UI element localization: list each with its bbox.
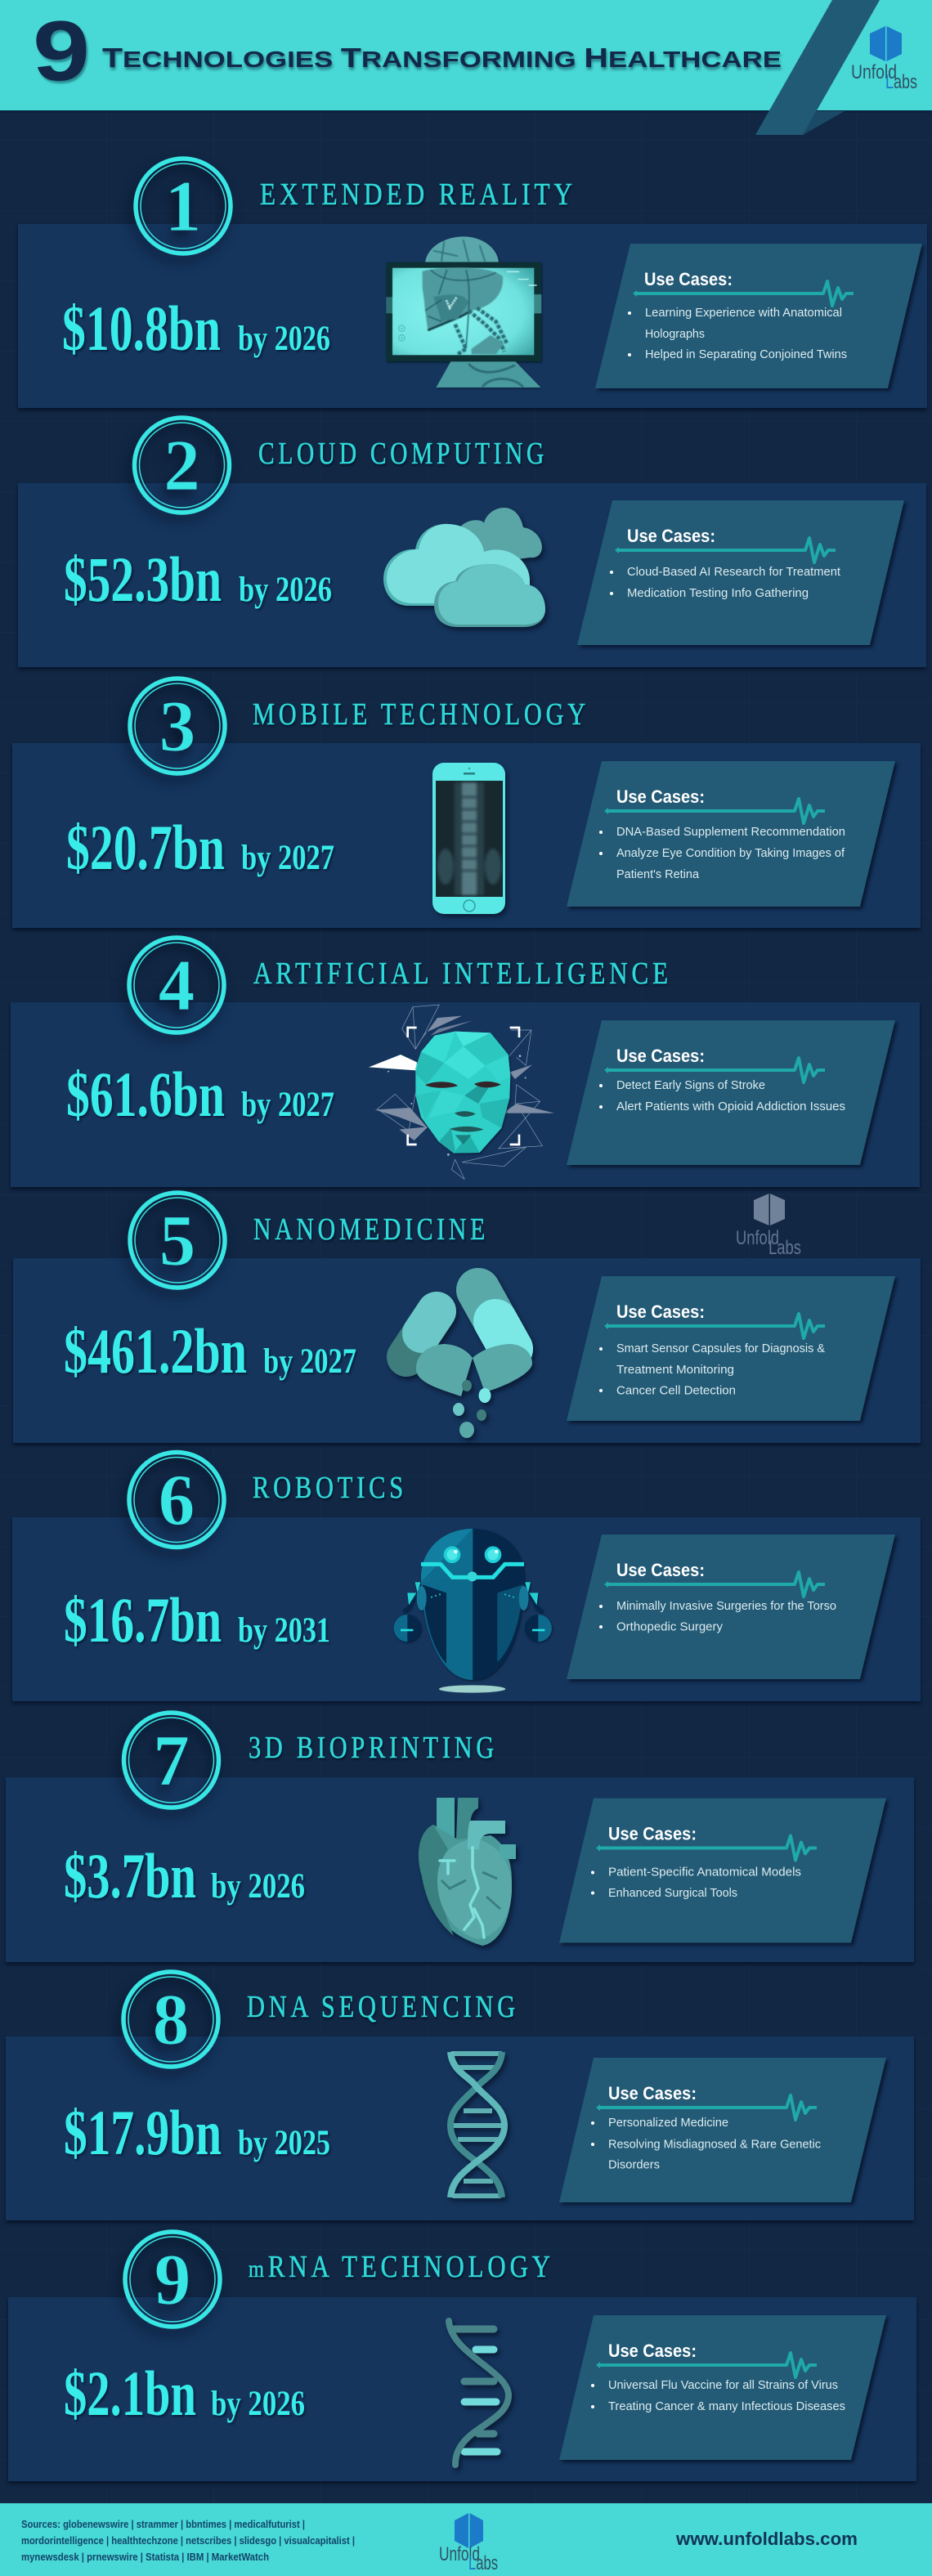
section 5: Nanomedicine xyxy=(13,1193,921,1443)
use cases panel: Use Cases: xyxy=(616,1046,705,1066)
title: TECHNOLOGIES TRANSFORMING HEALTHCARE xyxy=(102,43,782,73)
use cases panel: Cloud-Based AI Research for Treatment xyxy=(627,566,840,579)
heading: NANOMEDICINE xyxy=(253,1212,489,1247)
panel background xyxy=(12,1517,921,1701)
use cases panel xyxy=(559,2058,886,2202)
use cases panel: Personalized Medicine xyxy=(608,2117,728,2130)
use cases panel: Use Cases: xyxy=(616,786,705,807)
sources: mordorintelligence | healthtechzone | netscribes | slidesgo | visualcapitalist | xyxy=(21,2535,355,2547)
icon: robot xyxy=(394,1529,552,1693)
market size: by 2025 xyxy=(238,2124,330,2162)
use cases panel: Use Cases: xyxy=(616,1301,705,1322)
header logo xyxy=(851,26,917,93)
use cases panel xyxy=(567,761,895,907)
market size: $61.6bn xyxy=(66,1059,225,1130)
heading: EXTENDED REALITY xyxy=(260,177,576,212)
sources: Sources: globenewswire | strammer | bbntimes | medicalfuturist | xyxy=(21,2519,305,2530)
icon: mRNA strand xyxy=(449,2321,509,2465)
number badge 2 xyxy=(134,418,229,513)
use cases panel: Medication Testing Info Gathering xyxy=(627,587,809,600)
section 4: Artificial Intelligence xyxy=(11,938,920,1187)
panel background xyxy=(11,1002,920,1187)
market size: $52.3bn xyxy=(64,544,222,615)
heading: MOBILE TECHNOLOGY xyxy=(253,697,589,732)
sources xyxy=(21,2519,355,2563)
number badge 2: 2 xyxy=(164,426,200,506)
heading: CLOUD COMPUTING xyxy=(258,437,548,471)
heading: DNA SEQUENCING xyxy=(247,1990,519,2024)
number badge 4: 4 xyxy=(159,946,195,1026)
footer logo: Labs xyxy=(468,2552,498,2574)
number badge 9: 9 xyxy=(155,2240,190,2320)
heading: ROBOTICS xyxy=(253,1471,407,1505)
use cases panel: Orthopedic Surgery xyxy=(616,1620,724,1633)
market size: by 2026 xyxy=(211,2385,305,2423)
use cases panel xyxy=(567,1276,895,1421)
section 2: Cloud Computing xyxy=(18,418,926,667)
number badge 8: 8 xyxy=(153,1980,189,2060)
icon: clouds xyxy=(383,508,545,627)
header logo: Labs xyxy=(885,71,917,93)
number badge 7 xyxy=(124,1713,219,1808)
panel background xyxy=(12,743,921,928)
section 8: DNA Sequencing xyxy=(6,1972,914,2220)
number badge 6 xyxy=(129,1452,224,1547)
use cases panel: Cancer Cell Detection xyxy=(616,1385,736,1398)
number badge 7: 7 xyxy=(153,1721,190,1801)
watermark logo: Labs xyxy=(768,1237,801,1259)
use cases panel: Holographs xyxy=(645,328,705,341)
footer band xyxy=(0,2503,932,2576)
use cases panel: Alert Patients with Opioid Addiction Issues xyxy=(616,1100,845,1113)
section 3: Mobile Technology xyxy=(12,679,921,928)
watermark logo xyxy=(736,1194,801,1259)
panel background xyxy=(6,1777,914,1962)
section 7: 3D Bioprinting xyxy=(6,1713,914,1962)
website url: www.unfoldlabs.com xyxy=(675,2529,858,2549)
use cases panel xyxy=(595,244,922,388)
number badge 9 xyxy=(125,2232,220,2327)
panel background xyxy=(13,1258,921,1443)
market size: by 2031 xyxy=(238,1611,330,1650)
use cases panel: Learning Experience with Anatomical xyxy=(645,307,842,320)
section 6: Robotics xyxy=(12,1452,921,1701)
market size: $2.1bn xyxy=(64,2358,196,2429)
watermark logo: Unfold xyxy=(736,1227,779,1249)
use cases panel: Analyze Eye Condition by Taking Images of xyxy=(616,847,845,860)
panel background xyxy=(18,483,926,667)
icon: skull hologram on screen xyxy=(386,236,541,388)
market size: by 2026 xyxy=(211,1867,305,1906)
heading: ARTIFICIAL INTELLIGENCE xyxy=(253,956,672,991)
panel background xyxy=(6,2036,914,2220)
use cases panel xyxy=(567,1534,895,1679)
use cases panel: Treating Cancer & many Infectious Diseases xyxy=(608,2400,845,2413)
use cases panel xyxy=(559,1799,886,1942)
use cases panel: Use Cases: xyxy=(616,1560,705,1580)
icon: polygon AI face xyxy=(369,1005,554,1180)
use cases panel: Use Cases: xyxy=(627,526,715,546)
market size: $20.7bn xyxy=(66,812,225,883)
number badge 6: 6 xyxy=(159,1460,195,1540)
use cases panel: Use Cases: xyxy=(608,2083,697,2103)
icon: nano capsules xyxy=(406,1290,532,1438)
icon: DNA helix xyxy=(450,2052,504,2197)
use cases panel: Use Cases: xyxy=(608,2341,697,2361)
market size: by 2027 xyxy=(263,1342,356,1381)
number badge 4 xyxy=(129,938,224,1033)
panel background xyxy=(18,224,927,408)
heading: 3D BIOPRINTING xyxy=(249,1731,498,1765)
header logo: Unfold xyxy=(851,61,897,83)
title numeral 9: 9 xyxy=(33,4,90,99)
use cases panel: Minimally Invasive Surgeries for the Torso xyxy=(616,1600,836,1613)
use cases panel xyxy=(559,2315,886,2460)
panel background xyxy=(8,2297,916,2481)
use cases panel: DNA-Based Supplement Recommendation xyxy=(616,826,845,839)
number badge 3: 3 xyxy=(159,687,195,767)
use cases panel: Smart Sensor Capsules for Diagnosis & xyxy=(616,1342,825,1355)
footer logo xyxy=(439,2513,498,2574)
market size: by 2027 xyxy=(241,1086,334,1124)
use cases panel: Use Cases: xyxy=(608,1823,697,1844)
number badge 5: 5 xyxy=(159,1201,195,1281)
icon: smartphone with x-ray xyxy=(432,763,505,914)
use cases panel xyxy=(577,500,904,645)
market size: by 2026 xyxy=(238,320,330,358)
number badge 8 xyxy=(123,1972,218,2067)
number badge 5 xyxy=(130,1193,225,1288)
heading: mRNA TECHNOLOGY xyxy=(249,2250,554,2284)
market size: $10.8bn xyxy=(62,293,221,364)
use cases panel: Resolving Misdiagnosed & Rare Genetic xyxy=(608,2139,821,2152)
market size: by 2027 xyxy=(241,839,334,877)
sources: mynewsdesk | prnewswire | Statista | IBM | MarketWatch xyxy=(21,2551,269,2563)
use cases panel: Enhanced Surgical Tools xyxy=(608,1887,737,1900)
icon: anatomical heart xyxy=(419,1798,516,1946)
use cases panel: Universal Flu Vaccine for all Strains of Virus xyxy=(608,2379,838,2392)
use cases panel: Patient's Retina xyxy=(616,868,700,881)
use cases panel: Detect Early Signs of Stroke xyxy=(616,1079,765,1092)
use cases panel xyxy=(567,1020,895,1165)
header band xyxy=(0,0,932,135)
number badge 1: 1 xyxy=(165,167,201,247)
use cases panel: Disorders xyxy=(608,2158,660,2171)
market size: by 2026 xyxy=(239,571,332,609)
use cases panel: Patient-Specific Anatomical Models xyxy=(608,1866,801,1879)
section 1: Extended Reality xyxy=(18,159,927,408)
use cases panel: Use Cases: xyxy=(644,269,733,289)
section 9: mRNA Technology xyxy=(8,2232,916,2481)
market size: $3.7bn xyxy=(64,1840,196,1911)
number badge 3 xyxy=(130,679,225,773)
footer logo: Unfold xyxy=(439,2543,480,2565)
number badge 1 xyxy=(136,159,231,253)
use cases panel: Treatment Monitoring xyxy=(616,1364,734,1377)
market size: $17.9bn xyxy=(64,2097,222,2168)
market size: $16.7bn xyxy=(64,1584,222,1655)
use cases panel: Helped in Separating Conjoined Twins xyxy=(645,348,847,361)
market size: $461.2bn xyxy=(64,1315,247,1387)
